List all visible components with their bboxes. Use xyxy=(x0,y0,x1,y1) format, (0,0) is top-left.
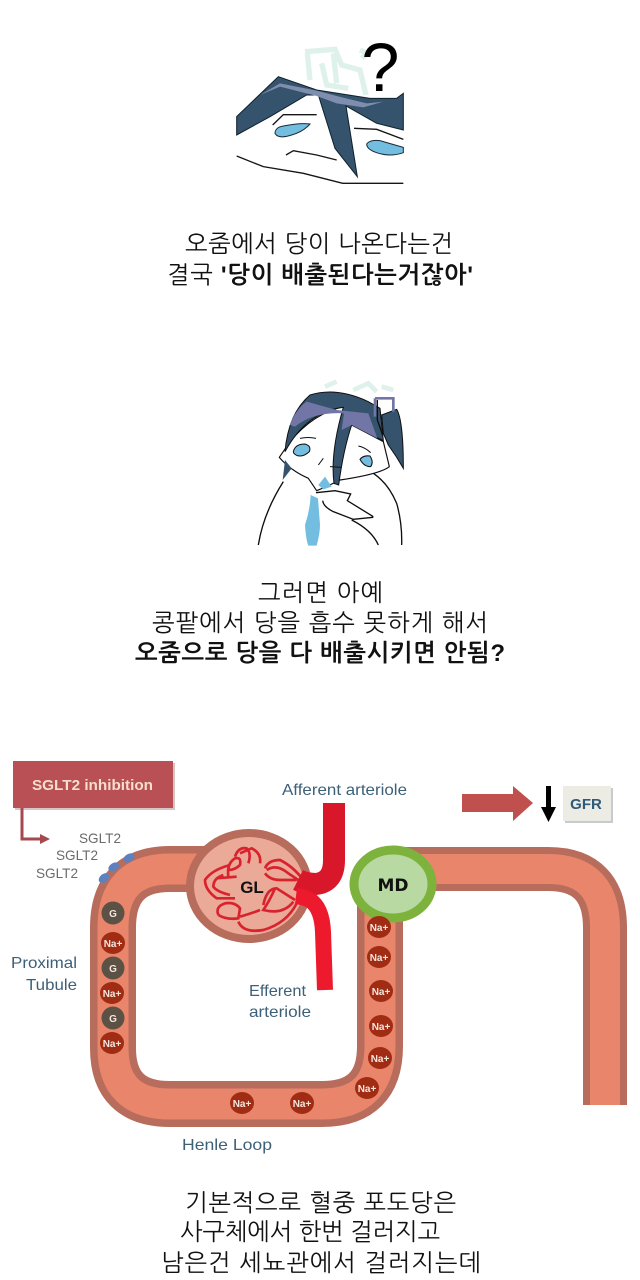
label: GL: GL xyxy=(240,878,264,897)
label: proximal tubule: Proximal xyxy=(11,955,77,972)
ions: sodium in ascending limb and loop: Na+ xyxy=(233,1099,251,1110)
text: first caption xyxy=(167,231,473,289)
ions: sodium in ascending limb and loop: Na+ xyxy=(293,1099,311,1110)
text: third caption: 기본적으로 혈중 포도당은 xyxy=(185,1190,456,1217)
vessel: afferent arteriole xyxy=(298,803,334,884)
ions: glucose and sodium in proximal tubule: Na+ xyxy=(103,1039,121,1050)
ions: glucose and sodium in proximal tubule xyxy=(100,902,125,1054)
arrow: red right arrow xyxy=(462,786,533,821)
transporters: SGLT2 dots xyxy=(97,852,136,885)
question mark: ? xyxy=(361,30,399,106)
label: afferent arteriole: Afferent arteriole xyxy=(282,782,407,799)
text: first caption: 오줌에서 당이 나온다는건 xyxy=(185,231,453,258)
text: third caption: 사구체에서 한번 걸러지고 xyxy=(180,1219,440,1246)
ions: glucose and sodium in proximal tubule: Na+ xyxy=(104,939,122,950)
label: efferent arteriole: arteriole xyxy=(249,1004,311,1021)
ions: sodium in ascending limb and loop: Na+ xyxy=(372,987,390,998)
macula densa: MD xyxy=(354,850,432,918)
ions: glucose and sodium in proximal tubule: G xyxy=(109,964,117,975)
label: proximal tubule xyxy=(11,955,77,994)
ions: sodium in ascending limb and loop xyxy=(230,916,393,1114)
diagram: nephron with SGLT2 inhibition xyxy=(11,761,613,1154)
text: third caption: 남은건 세뇨관에서 걸러지는데 xyxy=(161,1250,481,1277)
label: Henle Loop: Henle Loop xyxy=(182,1137,272,1154)
arrow: inhibition pointer xyxy=(22,808,44,839)
glomerulus: GL xyxy=(190,833,308,939)
ions: sodium in ascending limb and loop: Na+ xyxy=(370,923,388,934)
tubule: proximal tubule and Henle loop xyxy=(113,869,380,1104)
labels: SGLT2: SGLT2 xyxy=(79,830,121,846)
ions: glucose and sodium in proximal tubule: G xyxy=(109,909,117,920)
text: second caption: 그러면 아예 xyxy=(258,580,383,607)
label: efferent arteriole: Efferent xyxy=(249,983,307,1000)
text: second caption xyxy=(135,580,505,667)
illustration: confused character face xyxy=(237,30,403,183)
text: third caption xyxy=(161,1190,481,1277)
box: SGLT2 inhibition xyxy=(13,761,175,810)
macula densa: MD: MD xyxy=(377,876,409,896)
labels: SGLT2 xyxy=(36,830,121,881)
text: second caption: 오줌으로 당을 다 배출시키면 안됨? xyxy=(135,640,505,667)
ions: sodium in ascending limb and loop: Na+ xyxy=(372,1022,390,1033)
box: GFR: GFR xyxy=(570,796,602,813)
box: SGLT2 inhibition: SGLT2 inhibition xyxy=(32,777,153,794)
illustration: character thinking with hand on chin xyxy=(258,382,403,546)
labels: SGLT2: SGLT2 xyxy=(56,847,98,863)
box: GFR xyxy=(563,786,613,823)
ions: glucose and sodium in proximal tubule: G xyxy=(109,1014,117,1025)
ions: sodium in ascending limb and loop: Na+ xyxy=(370,953,388,964)
ions: sodium in ascending limb and loop: Na+ xyxy=(358,1084,376,1095)
label: proximal tubule: Tubule xyxy=(26,977,77,994)
arrowhead: inhibition pointer xyxy=(40,834,50,844)
labels: SGLT2: SGLT2 xyxy=(36,865,78,881)
ions: glucose and sodium in proximal tubule: Na+ xyxy=(103,989,121,1000)
tubule: distal tubule xyxy=(400,869,605,1105)
arrow: black down arrow xyxy=(541,786,556,822)
vessel: efferent arteriole xyxy=(296,896,325,990)
text: second caption: 콩팥에서 당을 흡수 못하게 해서 xyxy=(152,610,488,637)
text: first caption: 결국 '당이 배출된다는거잖아' xyxy=(167,262,473,289)
label: efferent arteriole xyxy=(249,983,311,1021)
ions: sodium in ascending limb and loop: Na+ xyxy=(371,1054,389,1065)
